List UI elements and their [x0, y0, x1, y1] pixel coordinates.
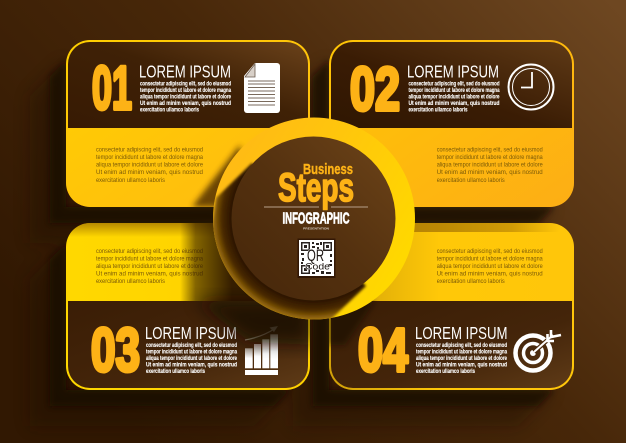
QR code: QR [307, 247, 324, 265]
panel 3 white text: tempor incididunt ut labore et dolore magna [146, 348, 237, 356]
long shadows of panels [30, 60, 554, 426]
panel 4 [329, 223, 574, 390]
panel 4 body text: Ut enim ad minim veniam, quis nostrud [437, 270, 543, 278]
panel 3 number: 03 [91, 316, 140, 384]
panel 4 white text: exercitation ullamco laboris [416, 368, 475, 375]
panel 2 body text: tempor incididunt ut labore et dolore magna [437, 154, 543, 161]
panel 1 white text [140, 80, 231, 114]
shadow of central circle on panels [180, 145, 375, 345]
panel 2 dark header [331, 42, 572, 128]
panel 4 body text [437, 248, 543, 285]
panel 2 white text: tempor incididunt ut labore et dolore magna [408, 87, 500, 94]
QR code [298, 238, 336, 278]
panel 3 white text [146, 342, 237, 375]
panel 3 body text [96, 248, 203, 285]
panel 2 white text: exercitation ullamco laboris [408, 106, 468, 114]
panel 1 body text: tempor incididunt ut labore et dolore magna [96, 154, 203, 161]
panel 2 [329, 40, 574, 207]
heading: Infographic: INFOGRAPHIC [282, 210, 350, 228]
icon: document [244, 63, 280, 113]
panel 1 white text: Ut enim ad minim veniam, quis nostrud [140, 100, 231, 107]
panel 2 body text: consectetur adipiscing elit, sed do eiusmod [437, 146, 543, 154]
panel 2 number: 02 [350, 55, 400, 123]
panel 3 top shading [70, 223, 214, 236]
panel 4 white text: Ut enim ad minim veniam, quis nostrud [416, 362, 507, 368]
panel 4 white text: aliqua tempor incididunt ut labore et dolore [416, 355, 507, 362]
caption: presentation: PRESENTATION [303, 226, 329, 230]
panel 2 white text: consectetur adipiscing elit, sed do eiusmod [408, 80, 500, 88]
panel 1 number: 01 [92, 54, 132, 122]
panel 1 body text: consectetur adipiscing elit, sed do eiusmod [96, 146, 203, 154]
panel 1 heading: LOREM IPSUM [139, 62, 231, 82]
icon: target [516, 330, 561, 370]
panel 4 body text: exercitation ullamco laboris [437, 278, 505, 285]
heading: Business: Business [303, 161, 353, 178]
panel 2 white text: Ut enim ad minim veniam, quis nostrud [408, 100, 500, 107]
panel 1 dark header [68, 42, 308, 128]
icon: bar chart [245, 326, 278, 375]
panel 3 dark footer [68, 301, 308, 388]
panel 3 body text: exercitation ullamco laboris [96, 278, 166, 285]
panel 4 white text [416, 342, 507, 375]
panel 2 body text [437, 146, 543, 184]
panel 4 heading: LOREM IPSUM [415, 323, 508, 343]
panel 3 body text: aliqua tempor incididunt ut labore et dolore [96, 263, 203, 270]
panel 3 [66, 223, 310, 390]
panel 3 body text: Ut enim ad minim veniam, quis nostrud [96, 270, 203, 278]
outer yellow ring [213, 118, 415, 320]
panel 1 body text [96, 146, 203, 184]
panel 1 white text: tempor incididunt ut labore et dolore magna [140, 87, 231, 94]
inner brown disc [232, 136, 396, 300]
panel 2 body text: exercitation ullamco laboris [437, 177, 505, 184]
central circle [213, 118, 415, 320]
panel 4 white text: consectetur adipiscing elit, sed do eiusmod [416, 342, 507, 349]
panel 3 heading: LOREM IPSUM [145, 323, 237, 343]
panel 1 white text: exercitation ullamco laboris [140, 106, 199, 114]
panel 4 body text: aliqua tempor incididunt ut labore et dolore [437, 263, 543, 270]
panel 1 body text: exercitation ullamco laboris [96, 177, 166, 184]
QR code: Code [305, 262, 330, 272]
panel 1 body text: Ut enim ad minim veniam, quis nostrud [96, 169, 203, 176]
panel 2 heading: LOREM IPSUM [407, 62, 499, 82]
panel 4 white text: tempor incididunt ut labore et dolore magna [416, 348, 507, 356]
panel 3 white text: exercitation ullamco laboris [146, 368, 205, 375]
icon: clock [508, 64, 554, 110]
panel 2 body text: aliqua tempor incididunt ut labore et dolore [437, 162, 543, 168]
panel 1 [66, 40, 310, 207]
panel 3 white text: Ut enim ad minim veniam, quis nostrud [146, 362, 237, 368]
panel 3 body text: consectetur adipiscing elit, sed do eiusmod [96, 248, 203, 255]
panel 3 white text: consectetur adipiscing elit, sed do eiusmod [146, 342, 237, 349]
panel 4 body text: tempor incididunt ut labore et dolore magna [437, 255, 543, 262]
panel 4 dark footer [331, 301, 572, 388]
panel 3 body text: tempor incididunt ut labore et dolore magna [96, 255, 203, 262]
ring inner shadow [213, 162, 368, 320]
panel 4 number: 04 [358, 316, 408, 384]
panel 1 white text: aliqua tempor incididunt ut labore et dolore [140, 94, 231, 100]
divider [264, 206, 368, 208]
panel 2 body text: Ut enim ad minim veniam, quis nostrud [437, 169, 543, 176]
panel 4 body text: consectetur adipiscing elit, sed do eiusmod [437, 248, 543, 255]
panel 3 white text: aliqua tempor incididunt ut labore et dolore [146, 355, 237, 362]
panel 2 white text [408, 80, 500, 114]
panel 1 white text: consectetur adipiscing elit, sed do eiusmod [140, 80, 231, 88]
panel 2 white text: aliqua tempor incididunt ut labore et dolore [408, 94, 500, 100]
panel 1 body text: aliqua tempor incididunt ut labore et dolore [96, 162, 203, 168]
heading: Steps: Steps [278, 166, 354, 210]
panel 4 top shading [414, 223, 552, 232]
